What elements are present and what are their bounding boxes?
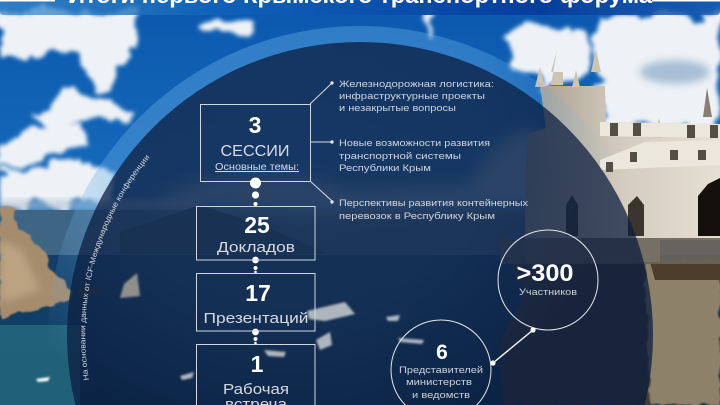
topic 3: перевозок в Республику Крым	[339, 211, 495, 222]
reports box: Докладов	[217, 239, 295, 256]
topic 2: Республики Крым	[339, 163, 431, 174]
reports box	[196, 206, 315, 260]
sessions box: СЕССИИ	[220, 143, 290, 160]
presentations box: Презентаций	[204, 310, 308, 327]
ministries circle	[391, 320, 491, 405]
ministries circle: и ведомств	[412, 389, 470, 400]
working meeting box	[196, 344, 315, 405]
title bar	[0, 0, 720, 15]
presentations box: 17	[245, 280, 271, 306]
sea stack and boats	[36, 273, 424, 382]
dots between boxes	[250, 178, 261, 344]
ministries circle: министерств	[406, 376, 472, 387]
connectors from sessions box to topics	[310, 82, 333, 203]
topic 2	[339, 138, 490, 174]
topic 1	[339, 79, 494, 114]
topic 1: и незакрытые вопросы	[339, 103, 456, 114]
connector between circles	[490, 327, 536, 366]
sessions box: 3	[249, 112, 261, 138]
curved source note: На основании данных от ICF-Международные конференции	[81, 155, 150, 380]
participants circle: Участников	[519, 287, 577, 297]
reports box: 25	[244, 212, 270, 238]
topic 3: Перспективы развития контейнерных	[339, 198, 528, 209]
working meeting box: 1	[251, 351, 264, 377]
ministries circle: Представителей	[399, 364, 483, 375]
sessions box	[200, 104, 310, 182]
presentations box	[196, 274, 315, 331]
dark circle overlay	[67, 42, 653, 405]
topic 1: Железнодорожная логистика:	[339, 79, 494, 90]
participants circle: >300	[516, 260, 574, 287]
topic 1: инфраструктурные проекты	[339, 91, 485, 102]
sessions box: Основные темы:	[215, 161, 299, 173]
topic 3	[339, 198, 528, 222]
working meeting box: Рабочая	[223, 381, 289, 398]
topic 2: транспортной системы	[339, 151, 461, 162]
participants circle	[498, 230, 598, 330]
ministries circle: 6	[436, 341, 448, 364]
topic 2: Новые возможности развития	[339, 138, 490, 149]
